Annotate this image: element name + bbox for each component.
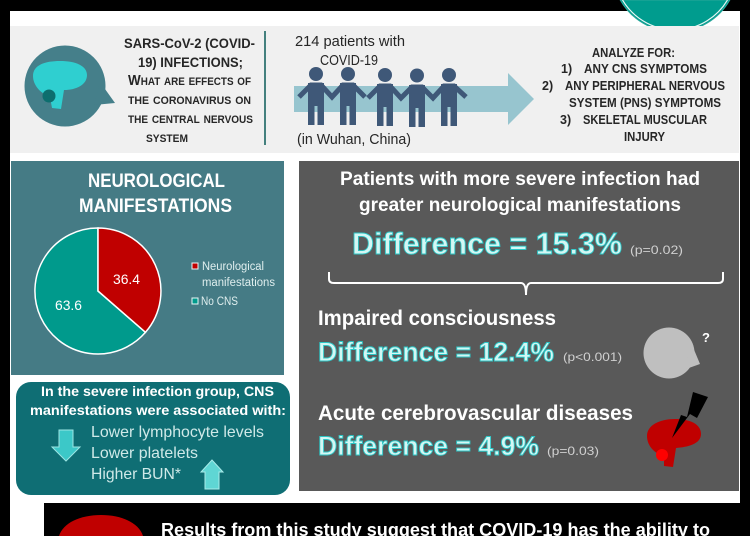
text: study question bbox=[124, 36, 255, 146]
stat: impaired consciousness: Difference = 12.4% bbox=[318, 337, 554, 367]
stat: impaired consciousness: Impaired consciousness bbox=[318, 307, 556, 330]
text: analysis list: 1) bbox=[561, 62, 572, 76]
pie chart bbox=[35, 228, 161, 354]
text: study question: system bbox=[146, 129, 188, 146]
text: 214 patients: 214 patients with bbox=[295, 33, 405, 50]
text: lab findings: Higher BUN* bbox=[91, 466, 181, 483]
text: location: (in Wuhan, China) bbox=[297, 131, 411, 148]
heading bbox=[340, 169, 700, 216]
heading: NEUROLOGICAL bbox=[88, 171, 225, 192]
text: analysis list: SKELETAL MUSCULAR bbox=[583, 113, 707, 127]
stat: impaired consciousness bbox=[318, 307, 622, 367]
text: study question: 19) INFECTIONS; bbox=[138, 55, 243, 70]
teal badge circle bbox=[620, 0, 730, 32]
icon: red brain bbox=[59, 515, 143, 536]
text: lab findings bbox=[91, 424, 264, 483]
icon: brain speech bubble bbox=[24, 46, 115, 126]
text: analysis list: ANY PERIPHERAL NERVOUS bbox=[565, 79, 725, 93]
text: study question: SARS-CoV-2 (COVID- bbox=[124, 36, 255, 51]
panel: neurological manifestations bbox=[11, 161, 284, 375]
icon: question speech bubble bbox=[644, 328, 710, 378]
text: analysis list: ANALYZE FOR: bbox=[592, 46, 675, 60]
panel: severity differences bbox=[299, 161, 739, 491]
text: study question: What are effects of bbox=[128, 72, 251, 89]
heading: Patients with more severe infection had bbox=[340, 169, 700, 190]
text: analysis list bbox=[542, 46, 725, 144]
stat: cerebrovascular diseases: (p=0.03) bbox=[547, 444, 599, 458]
text: analysis list: 2) bbox=[542, 79, 553, 93]
stat: overall difference: Difference = 15.3% bbox=[352, 226, 622, 261]
text: study question: the coronavirus on bbox=[128, 91, 251, 108]
legend: Neurological bbox=[202, 261, 264, 273]
legend: No CNS bbox=[201, 296, 238, 308]
text: analysis list: INJURY bbox=[624, 130, 666, 144]
icon: five linked people bbox=[299, 67, 466, 127]
text: 214 patients bbox=[295, 33, 405, 69]
text: analysis list: 3) bbox=[560, 113, 571, 127]
stat: cerebrovascular diseases: Acute cerebrovascular diseases bbox=[318, 402, 633, 425]
text: associations heading: manifestations were associated with: bbox=[30, 402, 286, 418]
icon: up arrow bbox=[201, 460, 223, 489]
icon: down arrow bbox=[52, 430, 80, 461]
text: 214 patients: COVID-19 bbox=[320, 52, 378, 69]
panel: severe infection associations bbox=[16, 382, 290, 495]
heading bbox=[79, 171, 232, 217]
text: analysis list: SYSTEM (PNS) SYMPTOMS bbox=[569, 96, 721, 110]
stat: cerebrovascular diseases: Difference = 4.9% bbox=[318, 431, 539, 461]
icon: question speech bubble: ? bbox=[702, 330, 710, 345]
stat: impaired consciousness: (p<0.001) bbox=[563, 350, 622, 364]
legend: manifestations bbox=[202, 277, 275, 289]
heading: greater neurological manifestations bbox=[359, 195, 681, 216]
text: associations heading bbox=[30, 383, 286, 418]
brace bbox=[329, 272, 723, 295]
heading: MANIFESTATIONS bbox=[79, 196, 232, 217]
stat: overall difference: (p=0.02) bbox=[630, 243, 683, 257]
text: lab findings: Lower platelets bbox=[91, 445, 198, 462]
pie chart: 63.6 bbox=[55, 297, 82, 313]
panel: study overview bbox=[10, 26, 739, 153]
text: associations heading: In the severe infection group, CNS bbox=[41, 383, 274, 399]
text: study question: the central nervous bbox=[128, 110, 253, 127]
legend bbox=[192, 261, 275, 308]
pie chart: 36.4 bbox=[113, 271, 140, 287]
text: lab findings: Lower lymphocyte levels bbox=[91, 424, 264, 441]
icon: brain with lightning bolt bbox=[647, 392, 708, 467]
stat: cerebrovascular diseases bbox=[318, 402, 633, 461]
text: analysis list: ANY CNS SYMPTOMS bbox=[584, 62, 707, 76]
panel: conclusion bbox=[44, 503, 750, 536]
arrow: patient flow bbox=[294, 73, 534, 125]
